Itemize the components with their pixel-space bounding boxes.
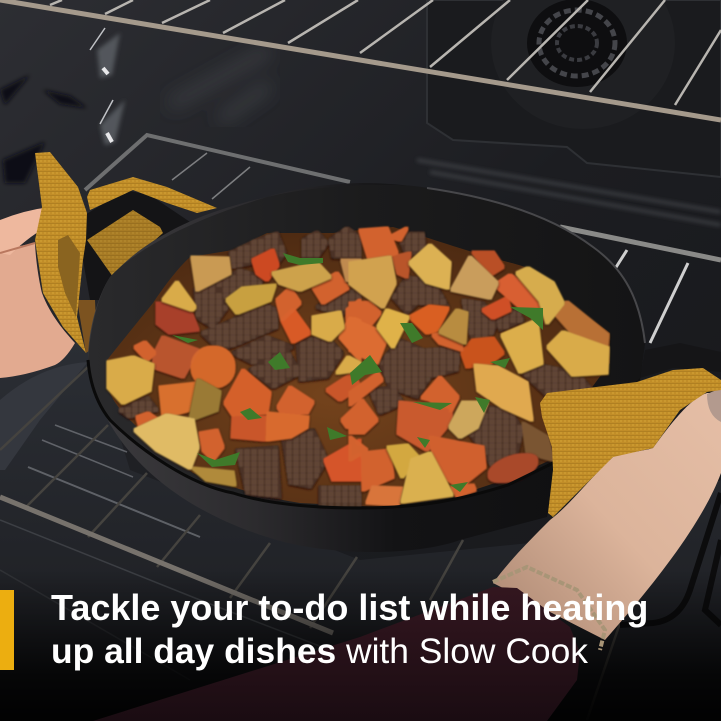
bracelet [493,567,605,650]
skillet outer body [88,183,645,552]
skillet inner wall [88,185,645,508]
right pan handle [640,343,721,378]
accent bar [0,590,14,670]
oven back wall details [0,0,721,225]
beef pieces [120,228,592,505]
left pan handle [83,190,190,300]
sleeve [93,587,580,721]
right oven mitt [540,368,721,517]
right hand and arm [493,388,721,640]
bottom text shading [0,570,721,721]
right oven frame [620,493,721,625]
middle oven rack [85,135,721,343]
title: up all day dishes with Slow Cook [51,631,588,671]
skillet [88,183,645,552]
left floor recess [0,362,88,470]
skillet lower rim line [88,360,553,508]
lower oven rack [0,367,620,720]
left hand [0,206,75,378]
title [51,587,648,671]
potato pieces [108,245,608,502]
title: Tackle your to-do list while heating [51,587,648,628]
stew broth [107,227,610,507]
oven floor [0,340,721,721]
parsley garnish [172,253,543,492]
floor highlights [0,425,330,680]
top oven rack [0,0,721,120]
left oven mitt [35,152,217,353]
carrot pieces [135,228,545,505]
